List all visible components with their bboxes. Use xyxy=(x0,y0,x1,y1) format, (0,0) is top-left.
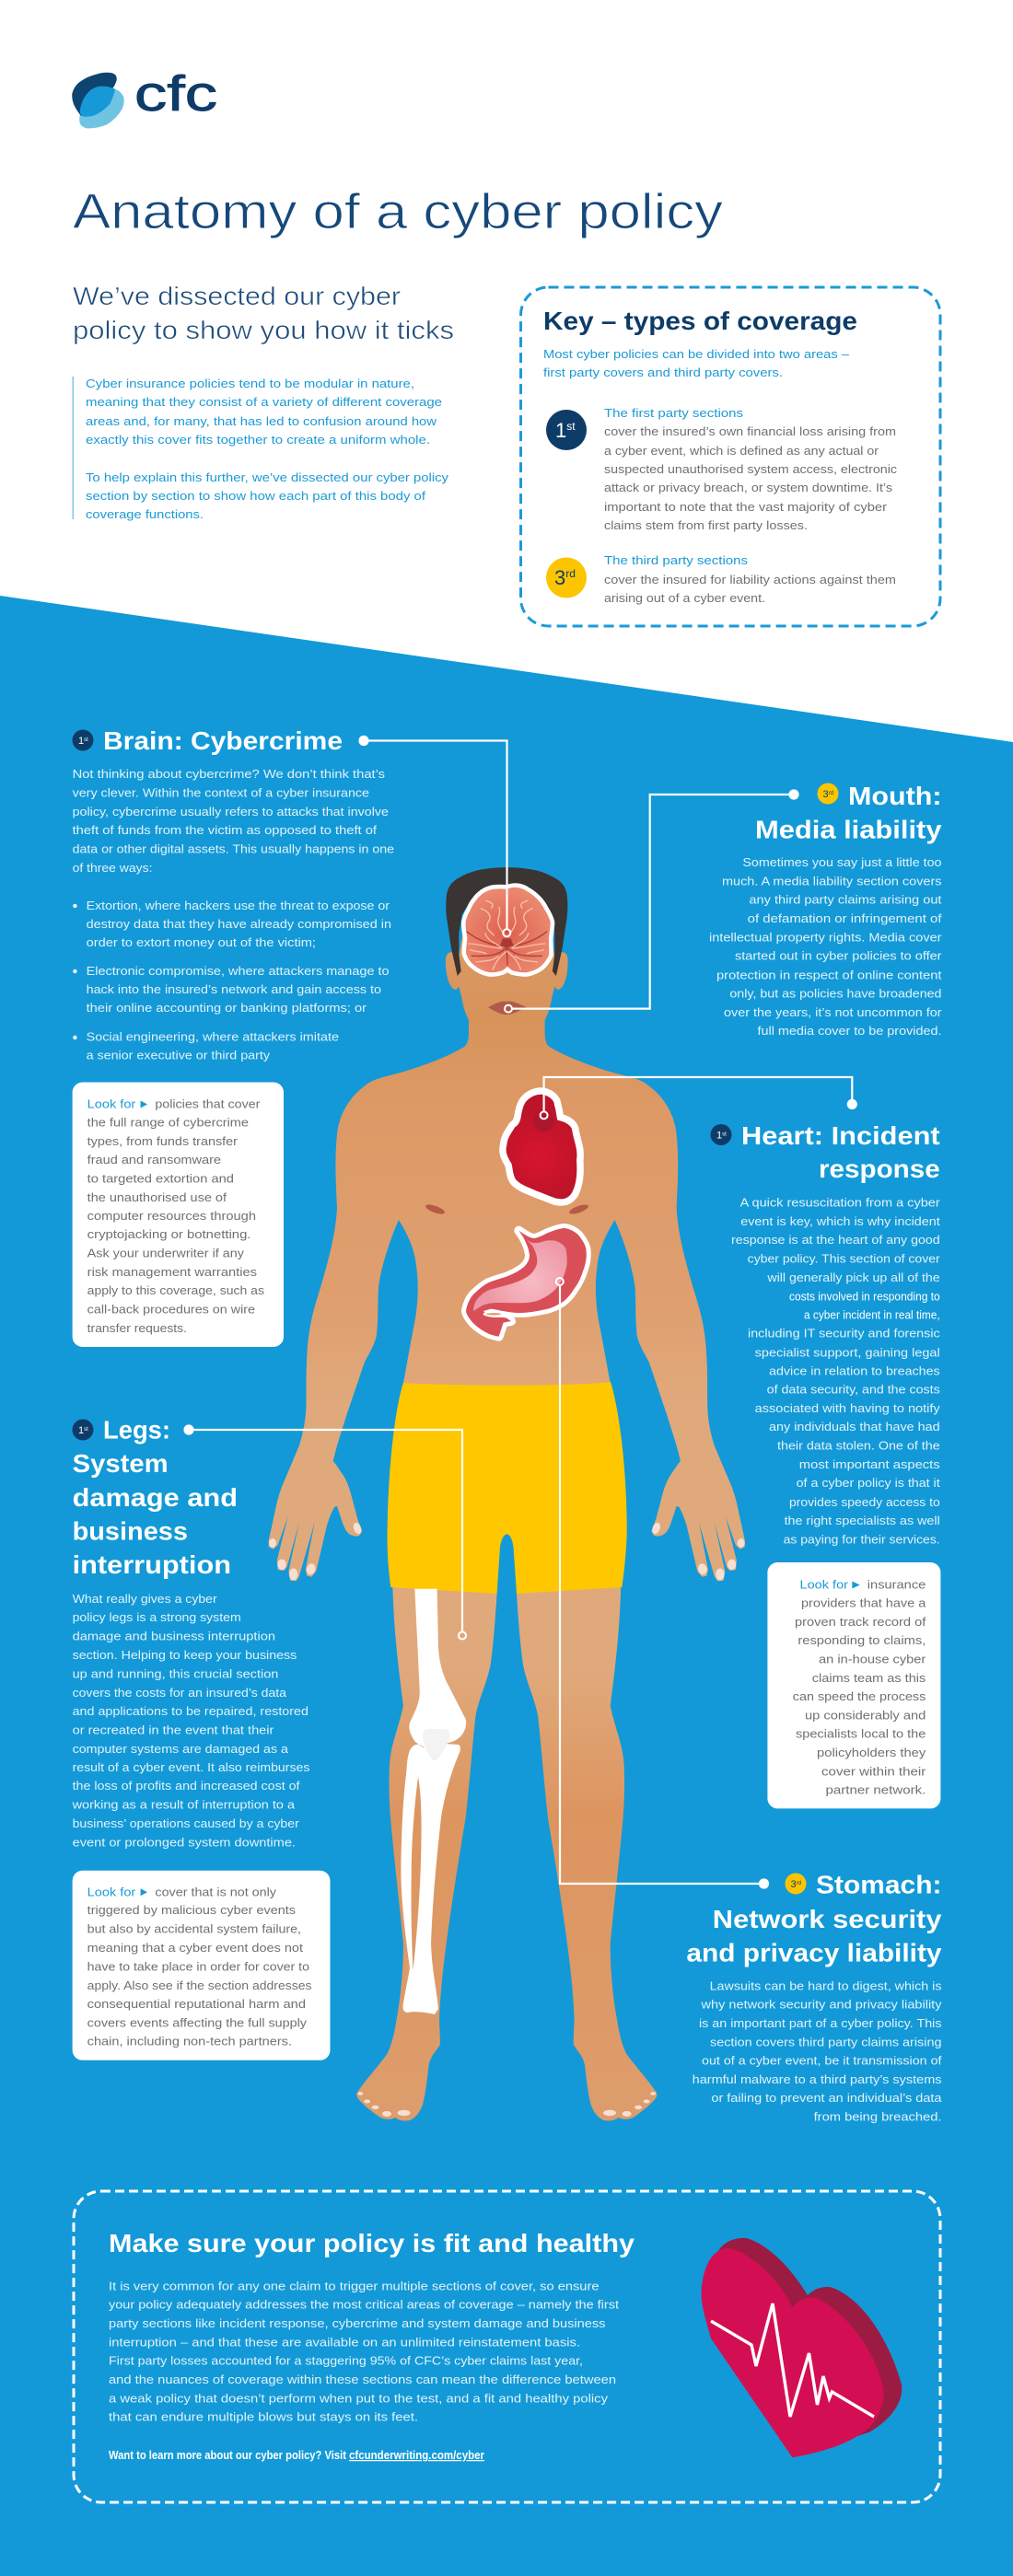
heading: stomach xyxy=(686,1871,942,1967)
stomach body text: is an important part of a cyber policy. This xyxy=(699,2016,942,2030)
mouth body text: Sometimes you say just a little too xyxy=(742,855,942,869)
title: Anatomy of a cyber policy xyxy=(73,184,723,239)
legs body text: business’ operations caused by a cyber xyxy=(73,1816,300,1830)
kneecap xyxy=(423,1729,449,1760)
key intro: first party covers and third party covers. xyxy=(543,366,783,379)
callout: look for, brain: Ask your underwriter if any xyxy=(87,1247,245,1259)
intro text block xyxy=(72,377,449,521)
icon: third party badge: 3 xyxy=(823,789,829,800)
legs body text: or recreated in the event that their xyxy=(73,1723,274,1737)
legs body text: the loss of profits and increased cost of xyxy=(73,1779,300,1793)
heart body text: cyber policy. This section of cover xyxy=(748,1251,940,1265)
intro text block: section by section to show how each part of this body of xyxy=(86,489,425,503)
heart body text: associated with having to notify xyxy=(755,1401,940,1415)
heart body text: of a cyber policy is that it xyxy=(797,1476,940,1490)
icon: first party badge: st xyxy=(84,1427,88,1433)
panel: key, types of coverage xyxy=(521,287,940,626)
mouth body text: intellectual property rights. Media cover xyxy=(709,930,942,945)
brain body text: theft of funds from the victim as opposed to theft of xyxy=(73,823,377,837)
icon: third party badge xyxy=(785,1873,807,1895)
call to action: Want to learn more about our cyber policy? Visit xyxy=(109,2449,347,2462)
icon: first party badge xyxy=(72,729,94,751)
nails xyxy=(269,1522,745,2117)
callout: look for, brain: Look for xyxy=(87,1097,136,1110)
heading: stomach: and privacy liability xyxy=(686,1939,942,1967)
callout: look for, legs: cover that is not only xyxy=(155,1885,277,1898)
icon: first party badge: 1 xyxy=(716,1131,722,1142)
mouth body text: much. A media liability section covers xyxy=(722,874,942,888)
first party text: claims stem from first party losses. xyxy=(604,518,808,532)
mouth body text: over the years, it’s not uncommon for xyxy=(724,1005,942,1019)
icon: first party badge: 1 xyxy=(78,1425,84,1436)
icon: heart with pulse xyxy=(702,2238,902,2457)
callout: look for, legs: covers events affecting the full supply xyxy=(87,2016,308,2030)
logo xyxy=(72,66,217,129)
heading: brain: Brain: Cybercrime xyxy=(103,726,343,755)
intro text block: areas and, for many, that has led to confusion around how xyxy=(86,414,437,428)
heart body text: their data stolen. One of the xyxy=(777,1438,940,1453)
key heading: Key – types of coverage xyxy=(543,307,857,335)
brain body text: of three ways: xyxy=(73,861,153,875)
heading: legs: System xyxy=(73,1449,169,1478)
brain bullet list: their online accounting or banking platforms; or xyxy=(87,1001,367,1015)
connector: stomach xyxy=(556,1278,768,1887)
callout: look for, heart: insurance xyxy=(867,1577,926,1591)
shorts xyxy=(387,1382,627,1594)
callout: look for, brain: types, from funds transfer xyxy=(87,1134,239,1148)
callout: look for, brain: to targeted extortion and xyxy=(87,1172,234,1186)
subheading: We’ve dissected our cyber xyxy=(73,282,401,310)
callout: look for, legs: but also by accidental system failure, xyxy=(87,1922,301,1936)
panel body text: First party losses accounted for a staggering 95% of CFC’s cyber claims last year, xyxy=(109,2354,583,2368)
third party text: The third party sections xyxy=(604,553,749,567)
icon: third party badge xyxy=(546,558,587,598)
icon: first party badge: 1 xyxy=(78,736,84,747)
heart body text: costs involved in responding to xyxy=(789,1289,940,1303)
heart body text: as paying for their services. xyxy=(784,1532,940,1547)
callout: look for, heart: Look for xyxy=(799,1577,849,1591)
call to action: cfcunderwriting.com/cyber xyxy=(349,2449,484,2462)
connector: mouth xyxy=(505,790,798,1013)
legs body text: damage and business interruption xyxy=(73,1630,275,1643)
panel body text: your policy adequately addresses the most critical areas of coverage – namely the first xyxy=(109,2298,619,2312)
mouth body text: protection in respect of online content xyxy=(716,968,942,981)
callout: look for, brain xyxy=(73,1083,284,1347)
intro text block: exactly this cover fits together to create a uniform whole. xyxy=(86,433,430,447)
subheading xyxy=(73,282,454,344)
brain bullet list: Social engineering, where attackers imitate xyxy=(87,1029,339,1044)
mouth body text: started out in cyber policies to offer xyxy=(735,949,942,963)
panel body text: a weak policy that doesn’t perform when put to the test, and a fit and healthy policy xyxy=(109,2391,609,2405)
heading: heart: response xyxy=(819,1155,940,1183)
callout: look for, heart: responding to claims, xyxy=(798,1633,926,1647)
intro text block: coverage functions. xyxy=(86,507,204,521)
stomach body text: harmful malware to a third party’s systems xyxy=(693,2072,942,2086)
heading: legs xyxy=(73,1416,238,1579)
organ: heart xyxy=(506,1095,576,1199)
icon: first party badge xyxy=(711,1124,731,1145)
callout: look for, heart: claims team as this xyxy=(812,1671,926,1685)
brain bullet list xyxy=(73,899,391,1062)
callout: look for, legs: chain, including non-tech partners. xyxy=(87,2035,292,2048)
first party text: cover the insured’s own financial loss arising from xyxy=(604,424,896,438)
heart body text: event is key, which is why incident xyxy=(740,1214,940,1228)
nipples xyxy=(425,1202,589,1216)
brain veins and creases xyxy=(467,891,547,969)
stomach body text: out of a cyber event, be it transmission of xyxy=(702,2054,942,2068)
first party text: a cyber event, which is defined as any actual or xyxy=(604,444,879,458)
brain body text: policy, cybercrime usually refers to attacks that involve xyxy=(73,805,389,818)
callout: look for, brain: fraud and ransomware xyxy=(87,1153,221,1166)
heading: mouth xyxy=(755,782,942,843)
brain bullet list: hack into the insured’s network and gain access to xyxy=(87,982,381,996)
stomach body text: from being breached. xyxy=(814,2110,941,2123)
first party text: important to note that the vast majority of cyber xyxy=(604,500,888,514)
leg bones xyxy=(401,1589,466,2014)
icon: first party badge: st xyxy=(84,737,88,743)
callout: look for, heart xyxy=(767,1562,940,1808)
logo wordmark: cfc xyxy=(134,66,217,122)
icon: first party badge xyxy=(72,1420,94,1440)
mouth body text: of defamation or infringement of xyxy=(748,911,942,925)
logo mark xyxy=(72,73,124,129)
callout: look for, legs: meaning that a cyber event does not xyxy=(87,1941,303,1955)
third party text: cover the insured for liability actions against them xyxy=(604,573,896,586)
brain bullet list: destroy data that they have already compromised in xyxy=(87,917,391,931)
panel: fit and healthy xyxy=(74,2191,940,2502)
legs body text: event or prolonged system downtime. xyxy=(73,1835,296,1849)
heart body text: specialist support, gaining legal xyxy=(755,1345,940,1359)
callout: look for, legs xyxy=(73,1871,330,2060)
intro text block: Cyber insurance policies tend to be modular in nature, xyxy=(86,377,414,390)
key intro xyxy=(543,347,850,379)
heading: mouth: Media liability xyxy=(755,816,942,843)
mouth body text xyxy=(709,855,942,1038)
callout: look for, heart: specialists local to the xyxy=(796,1727,926,1741)
heart body text: response is at the heart of any good xyxy=(731,1233,940,1247)
first party text: attack or privacy breach, or system downtime. It’s xyxy=(604,481,893,494)
panel body text: It is very common for any one claim to trigger multiple sections of cover, so ensure xyxy=(109,2279,599,2292)
section: stomach network security xyxy=(686,1871,942,2123)
blue background panel xyxy=(0,596,1013,2576)
icon: third party badge: 3 xyxy=(554,566,565,589)
mouth xyxy=(488,1001,527,1015)
heart body text xyxy=(731,1195,940,1547)
heading: stomach: Stomach: xyxy=(816,1871,941,1898)
panel body text: party sections like incident response, cybercrime and system damage and business xyxy=(109,2316,606,2330)
callout: look for, heart: cover within their xyxy=(821,1764,926,1778)
legs body text: and applications to be repaired, restored xyxy=(73,1704,309,1718)
callout: look for, heart: providers that have a xyxy=(801,1596,926,1610)
legs body text: section. Helping to keep your business xyxy=(73,1648,297,1662)
heading: legs: Legs: xyxy=(103,1416,170,1445)
heart body text: most important aspects xyxy=(799,1457,940,1471)
heart body text: a cyber incident in real time, xyxy=(804,1307,940,1322)
icon: first party badge: 1 xyxy=(555,419,566,442)
icon: third party badge: 3 xyxy=(790,1879,797,1890)
legs body text: up and running, this crucial section xyxy=(73,1666,278,1680)
body illustration xyxy=(269,867,745,2121)
connector: heart xyxy=(541,1077,856,1119)
callout: look for, heart: can speed the process xyxy=(793,1689,926,1703)
skin xyxy=(269,875,745,2121)
intro text block: meaning that they consist of a variety of different coverage xyxy=(86,395,442,409)
organ: stomach xyxy=(466,1228,587,1337)
stomach body text: Lawsuits can be hard to digest, which is xyxy=(710,1978,942,1992)
legs body text: computer systems are damaged as a xyxy=(73,1742,289,1756)
legs body text: policy legs is a strong system xyxy=(73,1610,241,1624)
heading: heart: Heart: Incident xyxy=(741,1121,940,1150)
brain bullet list: order to extort money out of the victim; xyxy=(87,935,316,949)
legs body text: working as a result of interruption to a xyxy=(71,1798,296,1812)
icon: first party badge xyxy=(546,410,587,450)
first party text: The first party sections xyxy=(604,406,744,420)
callout: look for, legs: apply. Also see if the section addresses xyxy=(87,1978,312,1992)
panel body text: that can endure multiple blows but stays on its feet. xyxy=(109,2410,418,2424)
mouth body text: only, but as policies have broadened xyxy=(729,987,942,1001)
callout: look for, heart: proven track record of xyxy=(795,1615,926,1629)
callout: look for, brain: policies that cover xyxy=(155,1097,261,1110)
brain bullet list: a senior executive or third party xyxy=(87,1048,271,1062)
icon: third party badge: rd xyxy=(797,1881,801,1886)
brain body text: Not thinking about cybercrime? We don’t think that’s xyxy=(73,767,386,781)
mouth body text: any third party claims arising out xyxy=(749,893,942,907)
callout: look for, brain: computer resources through xyxy=(87,1209,256,1223)
brain body text: data or other digital assets. This usually happens in one xyxy=(73,841,394,856)
section: heart incident response xyxy=(711,1121,940,1808)
icon: first party badge: st xyxy=(722,1132,727,1138)
callout: look for, heart: up considerably and xyxy=(805,1708,926,1722)
section: legs system damage xyxy=(71,1416,330,2060)
callout: look for, legs: consequential reputational harm and xyxy=(87,1997,306,2011)
heart body text: advice in relation to breaches xyxy=(769,1363,940,1377)
legs body text: What really gives a cyber xyxy=(73,1592,217,1606)
heading: legs: business xyxy=(73,1517,188,1545)
callout: look for, brain: transfer requests. xyxy=(87,1321,187,1335)
callout: look for, brain: cryptojacking or botnetting. xyxy=(87,1227,250,1241)
connector: legs xyxy=(184,1425,466,1639)
panel body text: interruption – and that these are available on an unlimited reinstatement basis. xyxy=(109,2335,580,2349)
icon: third party badge: rd xyxy=(829,791,833,796)
connector: brain xyxy=(359,737,510,936)
icon: first party badge: st xyxy=(566,420,576,433)
heart body text: A quick resuscitation from a cyber xyxy=(740,1195,940,1209)
callout: look for, brain: the unauthorised use of xyxy=(87,1190,227,1204)
section: mouth media liability xyxy=(709,782,942,1038)
third party text: arising out of a cyber event. xyxy=(604,591,765,605)
first party text: suspected unauthorised system access, electronic xyxy=(604,462,898,476)
hair xyxy=(446,867,567,976)
brain body text xyxy=(73,767,394,875)
icon: third party badge: rd xyxy=(565,567,576,580)
legs body text: covers the costs for an insured’s data xyxy=(73,1686,287,1700)
callout: look for, heart: policyholders they xyxy=(817,1746,926,1759)
icon: third party badge xyxy=(818,783,838,805)
heart body text: of data security, and the costs xyxy=(767,1383,940,1397)
subheading: policy to show you how it ticks xyxy=(73,316,454,344)
legs body text xyxy=(71,1592,310,1849)
heart body text: will generally pick up all of the xyxy=(766,1271,940,1284)
brain bullet list: Extortion, where hackers use the threat to expose or xyxy=(87,899,390,912)
callout: look for, legs: triggered by malicious cyber events xyxy=(87,1903,297,1917)
panel body text: and the nuances of coverage within these sections can mean the difference between xyxy=(109,2373,616,2386)
callout: look for, brain: risk management warranties xyxy=(87,1265,258,1279)
heart body text: any individuals that have had xyxy=(769,1420,940,1433)
heading: legs: damage and xyxy=(73,1483,238,1512)
callout: look for, legs: have to take place in order for cover to xyxy=(87,1959,309,1973)
callout: look for, brain: the full range of cybercrime xyxy=(87,1116,249,1130)
heart body text: the right specialists as well xyxy=(785,1514,940,1527)
third party text xyxy=(604,553,896,605)
panel heading: Make sure your policy is fit and healthy xyxy=(109,2229,635,2257)
heading: stomach: Network security xyxy=(713,1905,942,1933)
heart body text: including IT security and forensic xyxy=(748,1327,940,1340)
brain bullet list: Electronic compromise, where attackers manage to xyxy=(87,964,390,978)
callout: look for, brain: apply to this coverage, such as xyxy=(87,1283,265,1297)
stomach body text: section covers third party claims arising xyxy=(710,2035,941,2048)
first party text xyxy=(604,406,898,532)
heading: heart xyxy=(741,1121,940,1183)
panel body text xyxy=(109,2279,619,2424)
heading: legs: interruption xyxy=(73,1550,231,1579)
heart body text: provides speedy access to xyxy=(789,1495,940,1509)
brain body text: very clever. Within the context of a cyber insurance xyxy=(73,786,369,799)
stomach body text xyxy=(693,1978,942,2123)
callout: look for, brain: call-back procedures on wire xyxy=(87,1302,255,1317)
stomach body text: or failing to prevent an individual’s data xyxy=(711,2091,942,2105)
legs body text: result of a cyber event. It also reimburses xyxy=(73,1760,310,1774)
section: brain cybercrime xyxy=(72,726,394,1347)
key intro: Most cyber policies can be divided into two areas – xyxy=(543,347,850,361)
callout: look for, heart: an in-house cyber xyxy=(819,1652,926,1666)
mouth body text: full media cover to be provided. xyxy=(757,1024,941,1038)
stomach body text: why network security and privacy liability xyxy=(700,1998,942,2012)
callout: look for, legs: Look for xyxy=(87,1885,136,1898)
organ: brain xyxy=(463,885,553,975)
callout: look for, heart: partner network. xyxy=(825,1783,926,1797)
heading: mouth: Mouth: xyxy=(848,782,941,810)
intro text block: To help explain this further, we’ve dissected our cyber policy xyxy=(86,470,449,484)
